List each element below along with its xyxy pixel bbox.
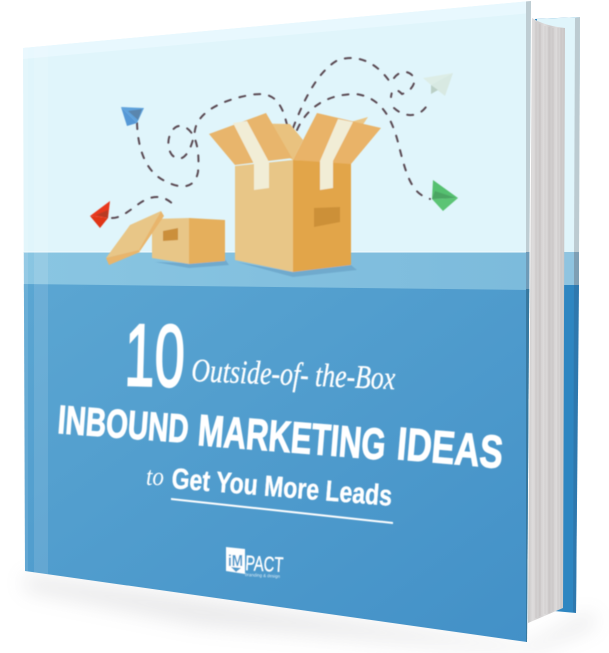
- icon: blue paper plane: [121, 107, 144, 126]
- packing tape: [233, 119, 353, 190]
- headline: [56, 398, 505, 478]
- icon: green paper plane: [432, 180, 458, 211]
- logo: IMPACT: [226, 547, 284, 579]
- title text: [56, 305, 505, 524]
- headline: INBOUND: [56, 398, 190, 452]
- page block: [528, 18, 565, 623]
- box handle: [314, 207, 340, 227]
- top highlight: [23, 1, 531, 59]
- lower blue panel: [23, 284, 531, 650]
- number 10: 10: [124, 305, 186, 406]
- floor band: [24, 252, 530, 292]
- large open box: [209, 113, 381, 277]
- box lid: [106, 211, 164, 265]
- headline: MARKETING: [196, 406, 387, 470]
- underline: [171, 498, 393, 524]
- icon: red paper plane: [90, 201, 110, 228]
- ground shadow: [25, 575, 596, 652]
- headline: IDEAS: [395, 417, 505, 478]
- logo: IMPACT: PACT: [245, 552, 284, 577]
- logo: IMPACT: branding & design: [245, 572, 281, 579]
- logo: IMPACT: iM: [228, 553, 243, 570]
- title text: Get You More Leads: [170, 463, 393, 513]
- spine strip: [24, 252, 28, 572]
- cover sky area: [23, 2, 526, 252]
- tagline: Outside-of- the-Box: [191, 353, 396, 397]
- right edge: [526, 1, 531, 252]
- icon: pale paper plane: [423, 73, 453, 96]
- back cover: [535, 17, 580, 613]
- small open box: [106, 211, 229, 268]
- subheading: to: [146, 462, 164, 491]
- dashed flight paths: [112, 58, 430, 218]
